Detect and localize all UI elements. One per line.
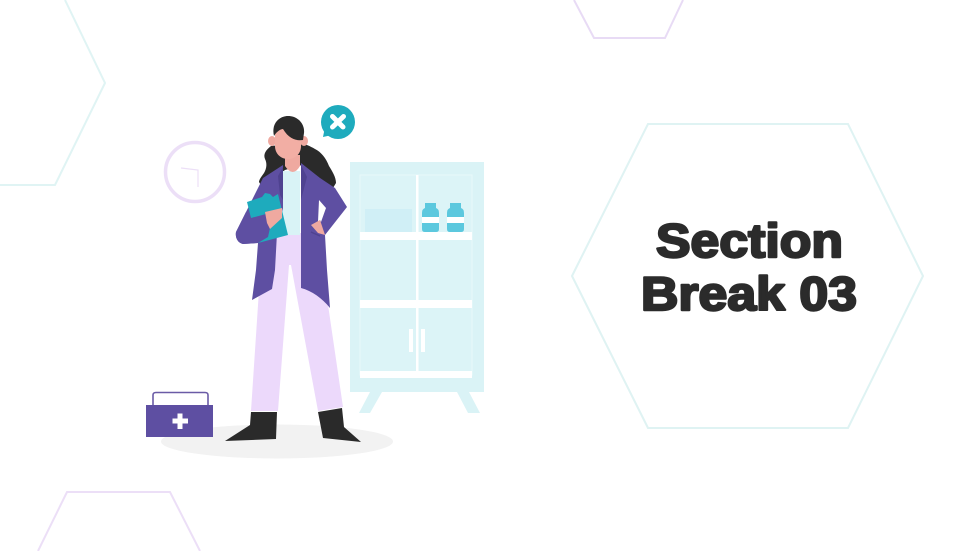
coat left panel <box>236 165 283 300</box>
trousers <box>251 233 343 411</box>
stack of folded linen <box>365 209 412 232</box>
title: Break 03 <box>641 267 857 320</box>
cabinet door frame <box>360 175 472 375</box>
cabinet body <box>350 162 484 392</box>
bottle left <box>422 203 439 232</box>
title <box>641 214 857 320</box>
pocket shadow <box>311 232 320 236</box>
sleeve over clipboard <box>236 212 270 244</box>
gap between arm and body <box>318 200 326 222</box>
hexagon: left partial <box>0 0 105 185</box>
title: Section <box>656 214 843 267</box>
medicine cabinet <box>350 162 484 413</box>
face <box>275 128 301 159</box>
cabinet door handles <box>409 329 425 352</box>
hexagon: title frame <box>572 124 923 428</box>
icon: wall clock <box>166 142 224 202</box>
front hair <box>273 116 304 140</box>
bottle right <box>447 203 464 232</box>
cabinet legs <box>359 392 480 413</box>
shirt <box>277 171 300 235</box>
ears <box>268 136 308 146</box>
boots <box>225 408 361 442</box>
cabinet shelves and centre bar <box>360 175 472 378</box>
hand on clipboard <box>265 208 282 229</box>
hexagon: bottom partial <box>38 492 200 551</box>
coat lapels <box>278 165 307 200</box>
hexagon: top partial <box>574 0 683 38</box>
speech bubble: cross icon <box>321 105 355 139</box>
back hair <box>259 143 336 188</box>
clipboard <box>247 193 288 243</box>
hand on hip <box>311 220 325 235</box>
floor shadow <box>161 424 393 458</box>
doctor figure <box>225 116 361 442</box>
coat right panel <box>301 163 347 308</box>
neck <box>285 155 300 172</box>
first aid kit <box>146 392 213 437</box>
